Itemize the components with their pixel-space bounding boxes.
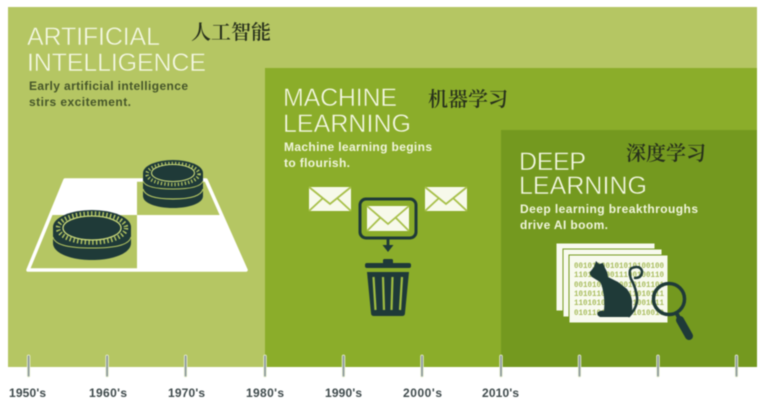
binary digits: 01011010101101010010 — [574, 308, 664, 318]
chinese label: deep learning: 深度学习 — [626, 142, 706, 165]
icon: selected envelope in frame — [360, 199, 416, 238]
icon: left envelope — [309, 187, 351, 211]
binary digits: 11010100110101001011 — [574, 298, 664, 308]
text block: artificial intelligence: Early artificial intelligence — [29, 79, 188, 93]
checker: single large — [53, 210, 131, 260]
text block: machine learning — [284, 140, 432, 170]
timeline labels: 1970's — [168, 386, 205, 400]
heading: machine learning: LEARNING — [283, 110, 411, 138]
icon: right envelope — [425, 187, 467, 211]
stacked data sheets — [556, 243, 668, 323]
text block: machine learning: Machine learning begins — [284, 140, 432, 154]
binary digits: 11011010011100100110 — [574, 270, 664, 280]
text block: deep learning: Deep learning breakthroughs — [520, 202, 698, 216]
arrow: envelope to trash — [382, 238, 394, 252]
checkerboard — [28, 180, 246, 270]
timeline labels: 1950's — [9, 386, 46, 400]
heading: deep learning — [519, 148, 647, 200]
heading: artificial intelligence: INTELLIGENCE — [27, 49, 206, 77]
timeline labels: 1990's — [325, 386, 362, 400]
timeline ticks — [27, 355, 738, 377]
text block: machine learning: to flourish. — [284, 156, 350, 170]
binary digits: 00101011010010101101 — [574, 280, 664, 290]
heading: artificial intelligence — [27, 23, 206, 77]
text block: deep learning — [520, 202, 698, 232]
heading: artificial intelligence: ARTIFICIAL — [27, 23, 160, 51]
binary digits: 10101101001011010111 — [574, 289, 664, 299]
icon: cat image recognition — [556, 243, 689, 336]
timeline labels: 2000's — [403, 386, 442, 400]
binary digits: 00101100101010100100 — [574, 261, 664, 271]
binary digits — [574, 261, 664, 318]
timeline labels: 1980's — [246, 386, 284, 400]
magnifying glass — [654, 284, 689, 336]
timeline labels — [9, 386, 519, 400]
timeline labels: 2010's — [482, 386, 519, 400]
text block: artificial intelligence — [29, 79, 188, 109]
panel: deep learning — [501, 130, 757, 367]
heading: deep learning: DEEP — [519, 148, 586, 176]
icon: checkerboard with checkers — [28, 160, 246, 270]
checker: stack of two — [143, 160, 203, 208]
heading: machine learning: MACHINE — [283, 84, 397, 112]
heading: deep learning: LEARNING — [519, 172, 647, 200]
text block: deep learning: drive AI boom. — [520, 218, 608, 232]
timeline labels: 1960's — [89, 386, 127, 400]
text block: artificial intelligence: stirs excitement. — [29, 95, 131, 109]
cat silhouette — [590, 261, 642, 317]
chinese label: machine learning: 机器学习 — [428, 88, 508, 111]
icon: trash can — [365, 259, 411, 316]
chinese label: artificial intelligence: 人工智能 — [191, 21, 271, 44]
heading: machine learning — [283, 84, 411, 138]
panel: machine learning — [265, 68, 757, 367]
